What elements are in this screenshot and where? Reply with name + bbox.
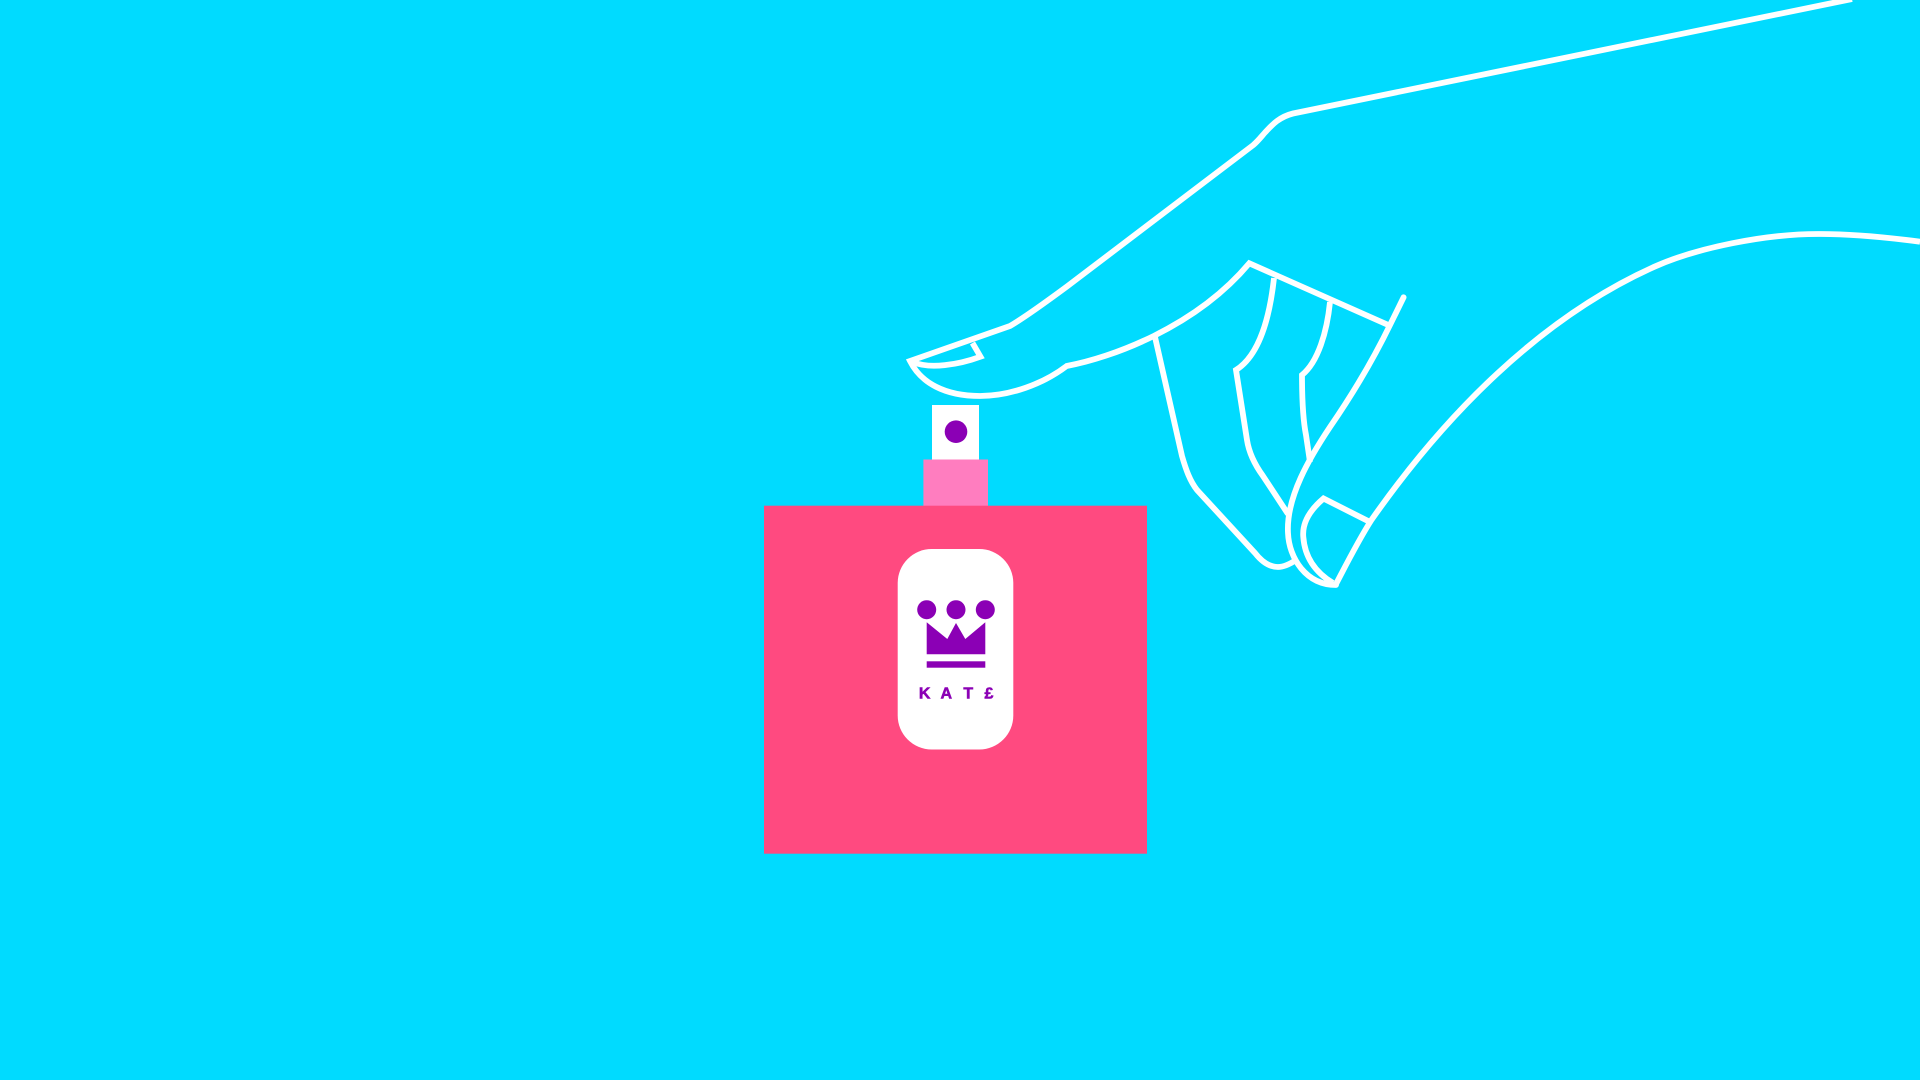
bottle sprayer <box>932 405 979 460</box>
brand name: A <box>941 685 953 702</box>
outer edge of folded fingers and thumb <box>1288 297 1404 585</box>
brand name: K <box>919 685 931 702</box>
bottle label <box>898 549 1013 750</box>
icon: crown logo <box>917 600 995 668</box>
brand name: T <box>963 685 973 702</box>
fingernail <box>914 343 980 366</box>
little finger <box>1302 302 1330 462</box>
middle finger <box>1155 337 1296 567</box>
brand name: £ <box>985 685 994 702</box>
thumbnail <box>1303 498 1370 583</box>
index finger and arm top edge <box>910 0 1852 396</box>
sprayer nozzle dot <box>945 420 967 443</box>
bottle body <box>764 506 1147 854</box>
bottle collar <box>923 460 988 506</box>
ring finger <box>1236 278 1288 514</box>
label background <box>898 549 1013 750</box>
perfume bottle <box>764 405 1147 854</box>
hand outline <box>910 0 1920 585</box>
thumb and lower arm edge <box>1336 234 1920 585</box>
